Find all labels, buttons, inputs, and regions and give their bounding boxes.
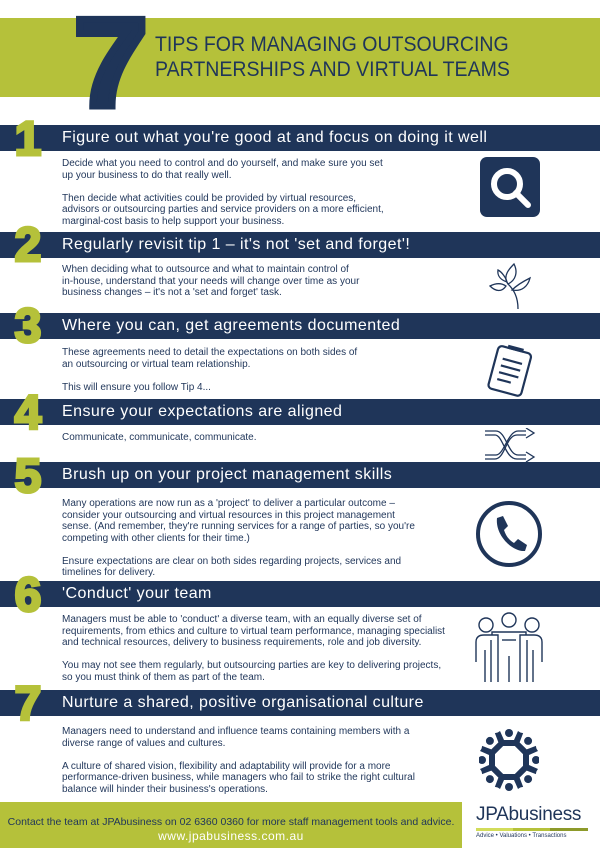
tip 3 heading [0,313,600,339]
tip 6 text: so you must think of them as part of the team. [62,672,265,682]
tip 6 text [62,614,445,682]
tip 3 heading: Where you can, get agreements documented [62,317,400,334]
tip 5 text: timelines for delivery. [62,567,155,578]
title: TIPS FOR MANAGING OUTSOURCING [155,33,509,56]
tip 7 text: Managers need to understand and influence teams containing members with a [62,726,409,737]
tip 2 heading [0,232,600,258]
tip 7 text: balance will hinder their business's operations. [62,784,268,794]
tip 6 text: requirements, from ethics and culture to virtual team performance, managing specialist [62,626,445,636]
tip 1 text [62,158,384,226]
tip 7 text: diverse range of values and cultures. [62,738,225,748]
tip 6 text: You may not see them regularly, but outsourcing parties are key to delivering projects, [62,660,441,671]
tip 1 text: advisors or outsourcing parties and service providers on a more efficient, [62,204,384,215]
logo: Advice • Valuations • Transactions [476,833,566,839]
tip 7 text: performance-driven business, while managers who fail to strike the right cultural [62,772,415,783]
tip 5 text: consider your outsourcing and virtual resources in this project management [62,510,395,520]
header band [0,18,600,97]
number 5: 5 [15,450,41,503]
icon: document [487,344,532,397]
logo: JPAbusiness [476,804,581,825]
tip 1 heading [0,125,600,151]
number 1: 1 [15,113,41,166]
icon: phone [476,501,542,567]
number 3: 3 [15,300,41,353]
tip 3 text: These agreements need to detail the expectations on both sides of [62,347,357,358]
tip 4 heading [0,399,600,425]
tip 7 heading [0,690,600,716]
icon: shuffle arrows [485,428,536,462]
icon: team [475,612,543,682]
title [155,33,510,81]
tip 6 text: Managers must be able to 'conduct' a diverse team, with an equally diverse set of [62,614,422,625]
icon: unity circle [479,729,539,791]
tip 5 text [62,498,415,578]
title: PARTNERSHIPS AND VIRTUAL TEAMS [155,58,510,81]
tip 3 text: This will ensure you follow Tip 4... [62,382,211,392]
tip 5 heading: Brush up on your project management skills [62,466,392,483]
tip 2 text: in-house, understand that your needs will change over time as your [62,276,359,286]
footer contact band [0,802,462,848]
tip 7 text [62,726,415,794]
tip 2 heading: Regularly revisit tip 1 – it's not 'set and forget'! [62,236,410,253]
tip 6 text: and technical resources, delivery to business requirements, role and job diversity. [62,637,421,648]
number 6: 6 [15,569,41,622]
footer contact band: Contact the team at JPAbusiness on 02 6360 0360 for more staff management tools and advice. [8,816,454,828]
tip 4 text: Communicate, communicate, communicate. [62,432,257,443]
tip 3 text: an outsourcing or virtual team relationship. [62,358,250,370]
number 2: 2 [15,219,41,272]
icon: leaf [489,262,531,309]
tip 5 heading [0,462,600,488]
number 7: 7 [15,678,41,731]
tip 5 text: competing with other clients for their time.) [62,532,250,544]
tip 2 text: business changes – it's not a 'set and forget' task. [62,287,282,298]
tip 6 heading: 'Conduct' your team [62,585,212,602]
tip 2 text: When deciding what to outsource and what to maintain control of [62,264,349,275]
logo [476,804,588,839]
tip 2 text [62,264,360,298]
tip 3 text [62,347,358,392]
footer contact band: www.jpabusiness.com.au [158,829,304,843]
tip 1 text: up your business to do that really well. [62,170,232,180]
tip 5 text: Many operations are now run as a 'project' to deliver a particular outcome – [62,498,395,509]
tip 1 text: Decide what you need to control and do yourself, and make sure you set [62,158,383,169]
tip 7 heading: Nurture a shared, positive organisational culture [62,694,424,711]
tip 1 text: Then decide what activities could be provided by virtual resources, [62,192,356,204]
tip 6 heading [0,581,600,607]
icon: magnifier [480,157,540,217]
number 4: 4 [15,387,41,440]
tip 1 heading: Figure out what you're good at and focus on doing it well [62,129,487,146]
tip 5 text: Ensure expectations are clear on both sides regarding projects, services and [62,556,401,566]
tip 1 text: marginal-cost basis to help support your business. [62,216,284,226]
tip 5 text: sense. (And remember, they're running services for a range of parties, so you're [62,521,415,532]
tip 7 text: A culture of shared vision, flexibility and adaptability will provide for a more [62,760,390,772]
tip 4 heading: Ensure your expectations are aligned [62,403,342,420]
